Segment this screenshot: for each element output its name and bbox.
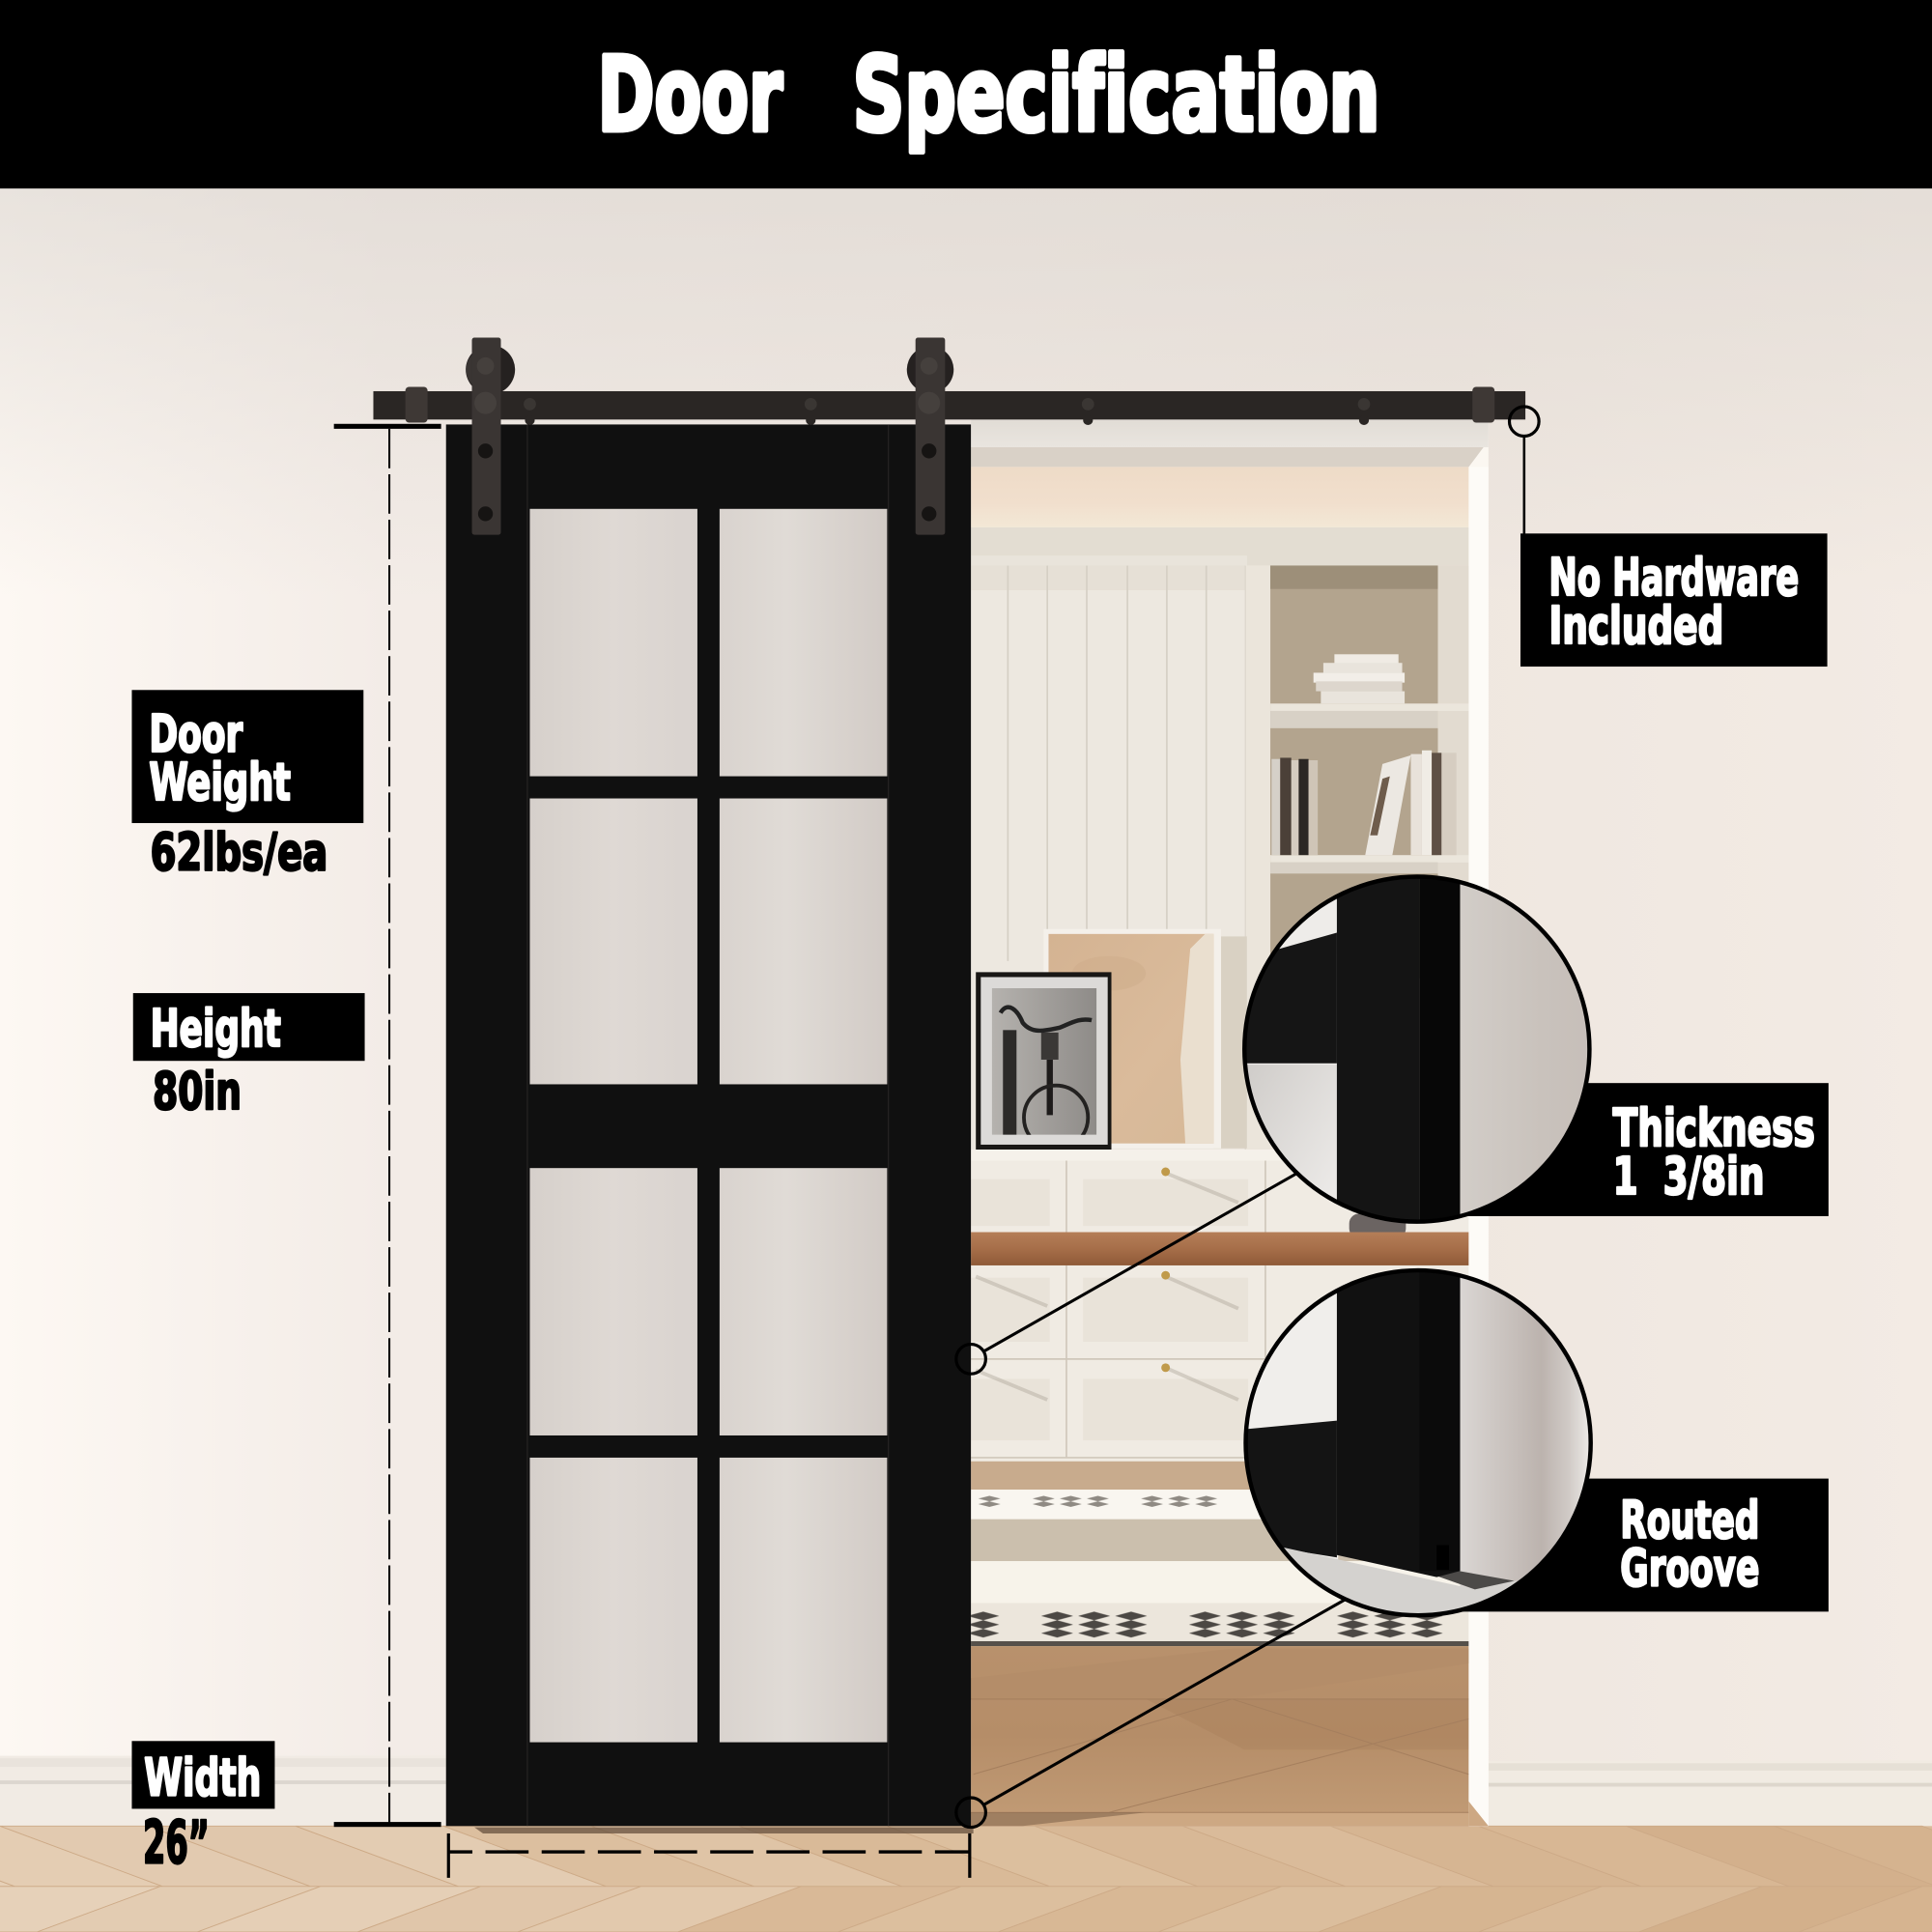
label: width: 26” [143,1809,210,1878]
label: no hardware included: No Hardware [1548,547,1799,608]
detail circle: thickness [1244,875,1596,1226]
leader: routed groove [956,1600,1346,1828]
label: routed groove [1460,1479,1829,1611]
label: routed groove: Routed [1620,1490,1759,1550]
label: thickness: Thickness [1613,1097,1815,1158]
door frame [971,419,1489,1826]
cabinets [971,1150,1468,1463]
herringbone floor in room [971,1646,1468,1826]
label: height: 80in [153,1061,242,1122]
label: door weight [131,690,363,883]
doorway interior [971,419,1489,1826]
lamp base [1350,1213,1406,1238]
label: width: Width [144,1747,261,1807]
crown moulding [971,527,1468,565]
title [598,36,1380,156]
label: width [131,1741,274,1878]
hanger left [466,337,515,535]
bookshelf [1246,565,1468,1157]
glass panels [529,509,887,1743]
title: Door [598,36,782,156]
label: door weight: Door [149,703,242,764]
bicycle photo [976,972,1112,1150]
label: no hardware included: Included [1548,595,1723,656]
label: height: Height [151,998,281,1059]
label: no hardware included [1509,407,1828,667]
stacked books [1314,654,1405,703]
panelled wall [971,555,1247,1153]
label: door weight: Weight [149,752,291,812]
title banner [0,0,1932,188]
upright books [1271,751,1457,855]
frame jamb [1468,467,1489,1826]
label: thickness [1460,1083,1829,1216]
width dimension line [448,1833,970,1878]
label: routed groove: Groove [1620,1538,1759,1599]
label: thickness: 1 3/8in [1613,1146,1765,1207]
ceiling glow [971,467,1468,527]
wooden counter [971,1233,1468,1265]
height dimension line [334,424,441,1827]
beige art print [1043,929,1221,1149]
title: Specification [853,36,1380,156]
barn door [446,424,971,1826]
baseboard right [1489,1761,1932,1826]
herringbone floor [0,1826,1932,1932]
door frame stiles and rails [446,424,971,1826]
baseboard left [0,1756,446,1826]
leader: thickness [956,1173,1297,1374]
sliding track rail [373,387,1525,425]
detail circle: routed groove [1244,1269,1596,1627]
label: door weight: 62lbs/ea [151,822,327,883]
shadow behind art [1213,936,1247,1149]
interior floor [971,1462,1468,1491]
rug [971,1490,1468,1646]
hanger right [907,337,953,535]
label: height [133,993,365,1122]
